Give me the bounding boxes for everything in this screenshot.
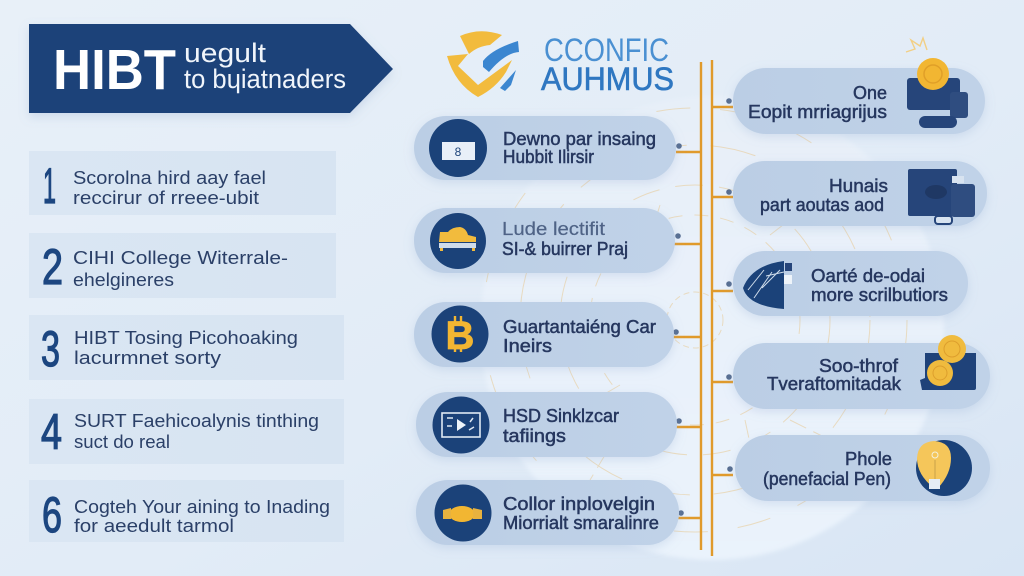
list item 6: Cogteh Your aining to Inading xyxy=(74,496,330,517)
list item 3: lacurmnet sorty xyxy=(74,347,222,368)
left pill 3: Guartantaiéng Car xyxy=(503,316,656,337)
icon: light bulb xyxy=(916,440,972,496)
logo text: CCONFIC xyxy=(544,32,669,68)
left pill 2 xyxy=(414,208,675,273)
left pill 4: tafiings xyxy=(503,425,566,446)
icon: wallet device xyxy=(908,169,975,224)
list item 1: Scorolna hird aay fael xyxy=(73,167,266,188)
list item 3: HIBT Tosing Picohoaking xyxy=(74,327,298,348)
list item 4 xyxy=(29,399,344,464)
left pill 1: Dewno par insaing xyxy=(503,128,656,149)
subtitle xyxy=(184,38,346,94)
icon: bitcoin xyxy=(432,306,488,362)
logo xyxy=(447,31,674,97)
icon: video screen xyxy=(432,396,490,454)
list item 6 xyxy=(29,480,344,543)
right pill 1: One xyxy=(853,82,887,103)
right pill 2 xyxy=(733,161,987,226)
left pill 1 xyxy=(414,116,676,180)
right pill 5: (penefacial Pen) xyxy=(763,468,891,489)
icon: shield logo xyxy=(447,31,519,97)
title: HIBT: HIBT xyxy=(53,38,176,102)
background disc with gold web xyxy=(480,96,944,560)
icon: banknote xyxy=(429,119,487,177)
right pill 4 xyxy=(733,335,990,409)
list item 2: ehelgineres xyxy=(73,269,174,290)
left pill 4 xyxy=(416,392,677,457)
subtitle: uegult xyxy=(184,38,267,68)
right pill 4: Tveraftomitadak xyxy=(767,373,902,394)
list item 2: 2 xyxy=(42,239,63,295)
right pill 3: more scrilbutiors xyxy=(811,284,948,305)
right pill 5 xyxy=(735,435,990,501)
left pill 4: HSD Sinklzcar xyxy=(503,405,619,426)
left pill 3: Ineirs xyxy=(503,335,552,356)
list item 6: 6 xyxy=(42,487,62,543)
left pill 5: Collor inplovelgin xyxy=(503,493,655,514)
left pill 1: Hubbit Ilirsir xyxy=(503,146,594,167)
list item 6: for aeedult tarmol xyxy=(74,515,234,536)
icon: bitcoin: B xyxy=(446,314,474,358)
right pill 1: Eopit mrriagrijus xyxy=(748,101,887,122)
icon: network dome xyxy=(743,261,792,309)
list item 2: CIHI College Witerrale- xyxy=(73,247,288,268)
right pill 3: Oarté de-odai xyxy=(811,265,925,286)
list item 1: reccirur of rreee-ubit xyxy=(73,187,259,208)
left pill 5: Miorrialt smaralinre xyxy=(503,512,659,533)
icon: car xyxy=(430,213,486,269)
left pill 3 xyxy=(414,302,674,367)
panel: numbered list xyxy=(29,151,344,543)
left pill 2: SI-& buirrer Praj xyxy=(502,238,628,259)
list item 3 xyxy=(29,315,344,380)
list item 1: 1 xyxy=(43,158,56,214)
right pill 5: Phole xyxy=(845,448,892,469)
right pill 1 xyxy=(733,38,985,134)
subtitle: to bɥiatnaders xyxy=(184,64,346,94)
list item 1 xyxy=(29,151,336,215)
list item 4: SURT Faehicoalynis tinthing xyxy=(74,410,319,431)
connector rails xyxy=(668,60,733,556)
list item 2 xyxy=(29,233,336,298)
right pill 4: Soo-throf xyxy=(819,355,899,376)
icon: computer with coin xyxy=(906,38,968,128)
logo text: AUHMUS xyxy=(541,61,674,97)
left pill 2: Lude lectifit xyxy=(502,218,605,239)
icon: banknote: 8 xyxy=(455,145,462,159)
left pill 5 xyxy=(416,480,679,545)
right pill 3 xyxy=(733,251,968,316)
icon: gold ticket xyxy=(434,484,492,542)
right pill 2: part aoutas aod xyxy=(760,194,884,215)
right pill 2: Hunais xyxy=(829,175,888,196)
logo text xyxy=(541,32,674,97)
title banner xyxy=(29,24,393,113)
list item 3: 3 xyxy=(41,321,60,377)
icon: wallet with coins xyxy=(920,335,976,390)
list item 4: 4 xyxy=(41,404,62,460)
list item 4: suct do real xyxy=(74,431,170,452)
